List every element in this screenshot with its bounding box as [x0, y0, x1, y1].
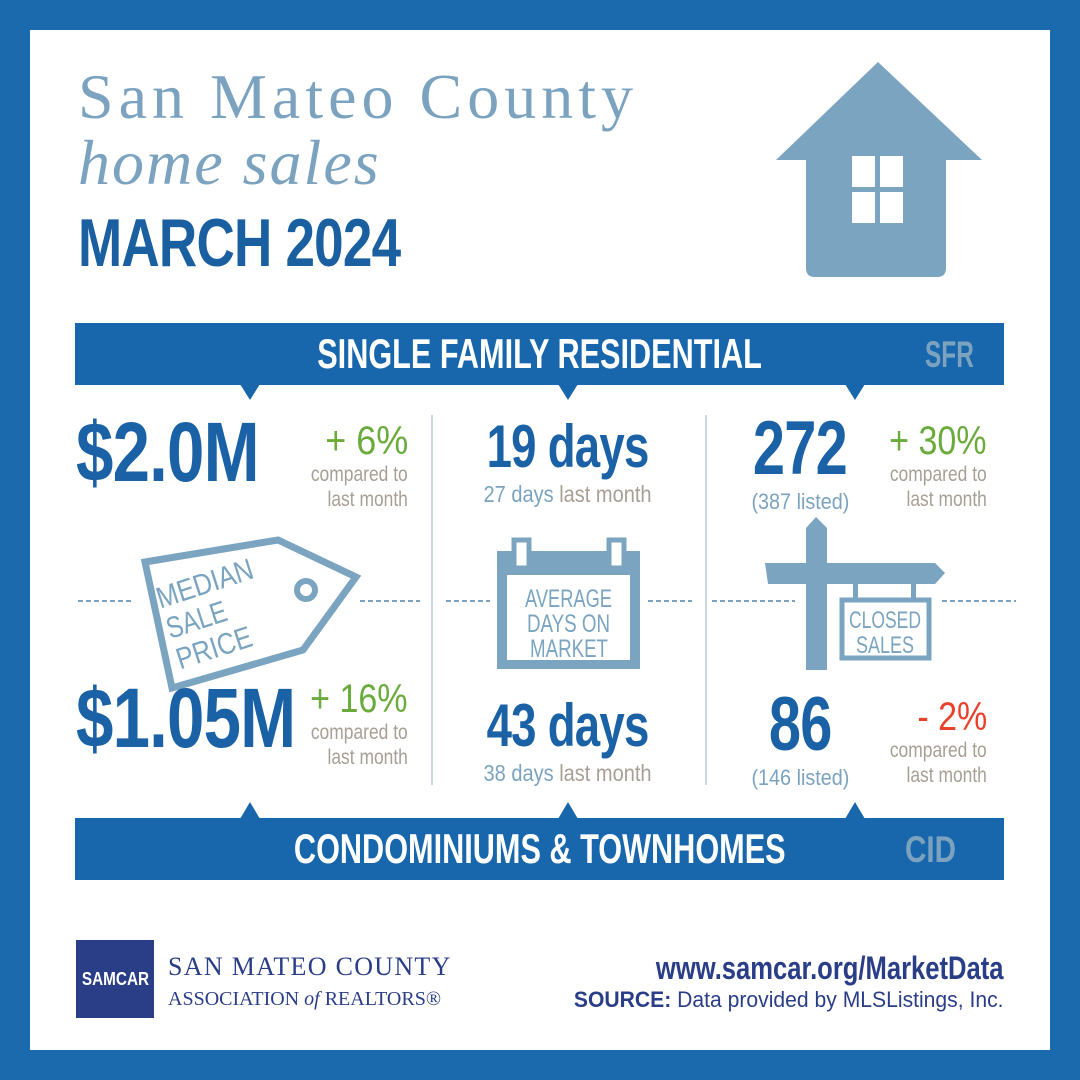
stat: CID median price: $1.05M [76, 671, 295, 765]
stat: SFR closed sales: last month [907, 488, 987, 511]
stat: SFR median price: compared to [311, 463, 408, 486]
stat: CID days on market: 43 days [487, 692, 649, 759]
stat: SFR median price: + 6% [325, 419, 408, 463]
stat: CID median price: last month [328, 746, 408, 769]
dividers [431, 415, 433, 785]
text: website and source [574, 950, 1004, 1012]
stat: CID median price: + 16% [311, 677, 408, 721]
stat: SFR days on market: 27 days last month [484, 481, 652, 507]
stat: SFR median price: $2.0M [76, 405, 259, 499]
stat: CID closed sales: last month [907, 764, 987, 787]
stat: CID closed sales: (146 listed) [751, 765, 849, 790]
icon: signpost: CLOSED [849, 607, 921, 634]
stat: SFR closed sales: (387 listed) [751, 489, 849, 514]
stat: CID median price [76, 671, 408, 769]
icon: calendar: DAYS ON [527, 610, 610, 638]
icon: calendar: MARKET [530, 635, 608, 663]
pointers up [240, 802, 864, 818]
stat: SFR days on market: 19 days [487, 413, 649, 480]
icon: price tag: SALE [162, 595, 231, 646]
icon: house [776, 62, 982, 277]
logo: SAMCAR [76, 940, 154, 1018]
stat: SFR median price [76, 405, 408, 511]
banner: condominiums & townhomes: CID [905, 829, 956, 870]
text: association name: ASSOCIATION of REALTORS® [168, 988, 441, 1010]
text: website and source: SOURCE: Data provided by MLSListings, Inc. [574, 987, 1004, 1012]
icon: price tag: MEDIAN [152, 553, 258, 615]
text: website and source: www.samcar.org/MarketData [656, 950, 1004, 986]
stat: SFR closed sales: compared to [890, 463, 987, 486]
text: association name: SAN MATEO COUNTY [168, 952, 452, 981]
stat: SFR closed sales: + 30% [890, 419, 987, 463]
logo: SAMCAR: SAMCAR [82, 969, 149, 989]
stat: SFR median price: last month [328, 488, 408, 511]
banner: single family residential: SINGLE FAMILY RESIDENTIAL [317, 330, 762, 377]
stat: CID closed sales [751, 682, 987, 790]
icon: signpost [765, 517, 945, 670]
title: San Mateo County [78, 61, 638, 132]
banner: single family residential [75, 323, 1004, 385]
stat: CID closed sales: 86 [769, 682, 831, 767]
text: association name [168, 952, 452, 1010]
icon: calendar [497, 538, 640, 669]
stat: CID days on market: 38 days last month [484, 760, 652, 786]
stat: CID days on market [484, 692, 652, 786]
banner: condominiums & townhomes [75, 818, 1004, 880]
pointers down [240, 385, 864, 400]
icon: calendar: AVERAGE [525, 585, 612, 613]
stat: CID closed sales: - 2% [917, 695, 987, 739]
stat: SFR closed sales: 272 [753, 406, 847, 491]
stat: SFR closed sales [751, 406, 987, 514]
icon: price tag [140, 536, 362, 692]
icon: signpost: SALES [856, 632, 914, 659]
title: home sales [78, 127, 381, 198]
title [78, 61, 638, 198]
stat: CID closed sales: compared to [890, 739, 987, 762]
banner: condominiums & townhomes: CONDOMINIUMS & TOWNHOMES [294, 825, 785, 872]
stat: CID median price: compared to [311, 721, 408, 744]
icon: price tag: PRICE [172, 621, 256, 676]
heading: date: MARCH 2024 [78, 205, 400, 281]
stat: SFR days on market [484, 413, 652, 507]
banner: single family residential: SFR [925, 334, 974, 375]
